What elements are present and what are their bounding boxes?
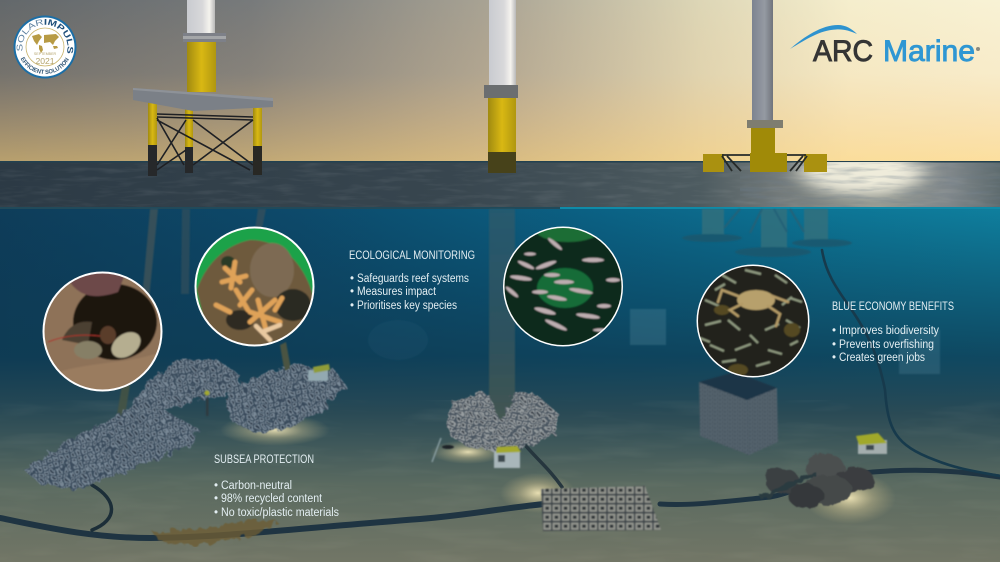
- logo registered mark: [976, 47, 980, 51]
- badge bottom text: EFFICIENT SOLUTION: [20, 56, 69, 74]
- right floating turbine: [703, 0, 827, 172]
- badge year: 2021: [35, 56, 55, 66]
- photo: starfish on reef: [194, 226, 315, 347]
- sky background: [0, 0, 1000, 163]
- text block: ecological monitoring: •: [350, 273, 354, 285]
- tower: [187, 0, 215, 34]
- text block: blue economy benefits: •: [832, 352, 836, 364]
- power cables: [0, 250, 1000, 538]
- gallery: [183, 33, 226, 42]
- text block: ecological monitoring: Measures impact: [357, 286, 437, 298]
- text block: ecological monitoring: ECOLOGICAL MONITORING: [349, 250, 475, 262]
- text block: ecological monitoring: Prioritises key species: [357, 300, 457, 312]
- submerged foundations: [112, 209, 852, 445]
- photo: school of fish: [503, 218, 623, 347]
- text block: blue economy benefits: •: [832, 325, 836, 337]
- reef: rectangular mattress: [541, 486, 661, 531]
- reef: left scour field: [24, 358, 240, 490]
- text block: blue economy benefits: Creates green jobs: [839, 352, 925, 364]
- logo swoosh: [790, 25, 857, 49]
- helideck platform: [133, 88, 273, 111]
- text block: subsea protection: No toxic/plastic materials: [221, 507, 339, 519]
- text block: ecological monitoring: •: [350, 286, 354, 298]
- text block: subsea protection: •: [214, 507, 218, 519]
- left jacket turbine: [133, 0, 273, 176]
- photo: crab on mussels: [696, 264, 810, 378]
- text block: subsea protection: SUBSEA PROTECTION: [214, 454, 314, 466]
- text block: subsea protection: [214, 454, 339, 519]
- logo ARC: ARC: [813, 35, 873, 68]
- text block: blue economy benefits: BLUE ECONOMY BENEFITS: [832, 301, 954, 313]
- jacket braces: [157, 114, 253, 170]
- reef: right scour field: [225, 365, 346, 433]
- text block: ecological monitoring: Safeguards reef systems: [357, 273, 469, 285]
- underwater background: [0, 207, 1000, 562]
- scour protection seaweed patch: [153, 520, 278, 545]
- text block: subsea protection: Carbon-neutral: [221, 480, 292, 492]
- text block: blue economy benefits: Prevents overfishing: [839, 339, 934, 351]
- text block: blue economy benefits: Improves biodiversity: [839, 325, 939, 337]
- text block: subsea protection: •: [214, 493, 218, 505]
- badge world map: [32, 34, 59, 53]
- ROV vehicles: [204, 364, 887, 468]
- badge month: SEPTEMBER: [34, 52, 56, 56]
- photo: lobster in burrow: [42, 272, 165, 394]
- logo Marine: Marine: [883, 35, 975, 68]
- text block: subsea protection: 98% recycled content: [221, 493, 323, 505]
- centre monopile turbine: [484, 0, 518, 173]
- jacket legs: [148, 102, 262, 176]
- submerged jacket left: [112, 209, 297, 445]
- reef cube clusters: [24, 358, 560, 490]
- reef: centre scour field: [446, 392, 560, 452]
- seabed lights: [220, 414, 896, 524]
- text block: ecological monitoring: •: [350, 300, 354, 312]
- submerged centre pile: [489, 209, 515, 422]
- reef block stack: [699, 372, 778, 455]
- wordmark logo: [790, 25, 980, 68]
- sea surface: [0, 161, 1000, 207]
- text block: blue economy benefits: •: [832, 339, 836, 351]
- text block: ecological monitoring: [349, 250, 475, 312]
- transition piece: [187, 42, 216, 92]
- text block: subsea protection: •: [214, 480, 218, 492]
- rock pile: [760, 454, 874, 508]
- distant reef blocks: [368, 309, 940, 374]
- submerged floating platform right: [682, 209, 852, 257]
- Solar Impulse badge: [14, 16, 76, 78]
- text block: blue economy benefits: [832, 301, 954, 364]
